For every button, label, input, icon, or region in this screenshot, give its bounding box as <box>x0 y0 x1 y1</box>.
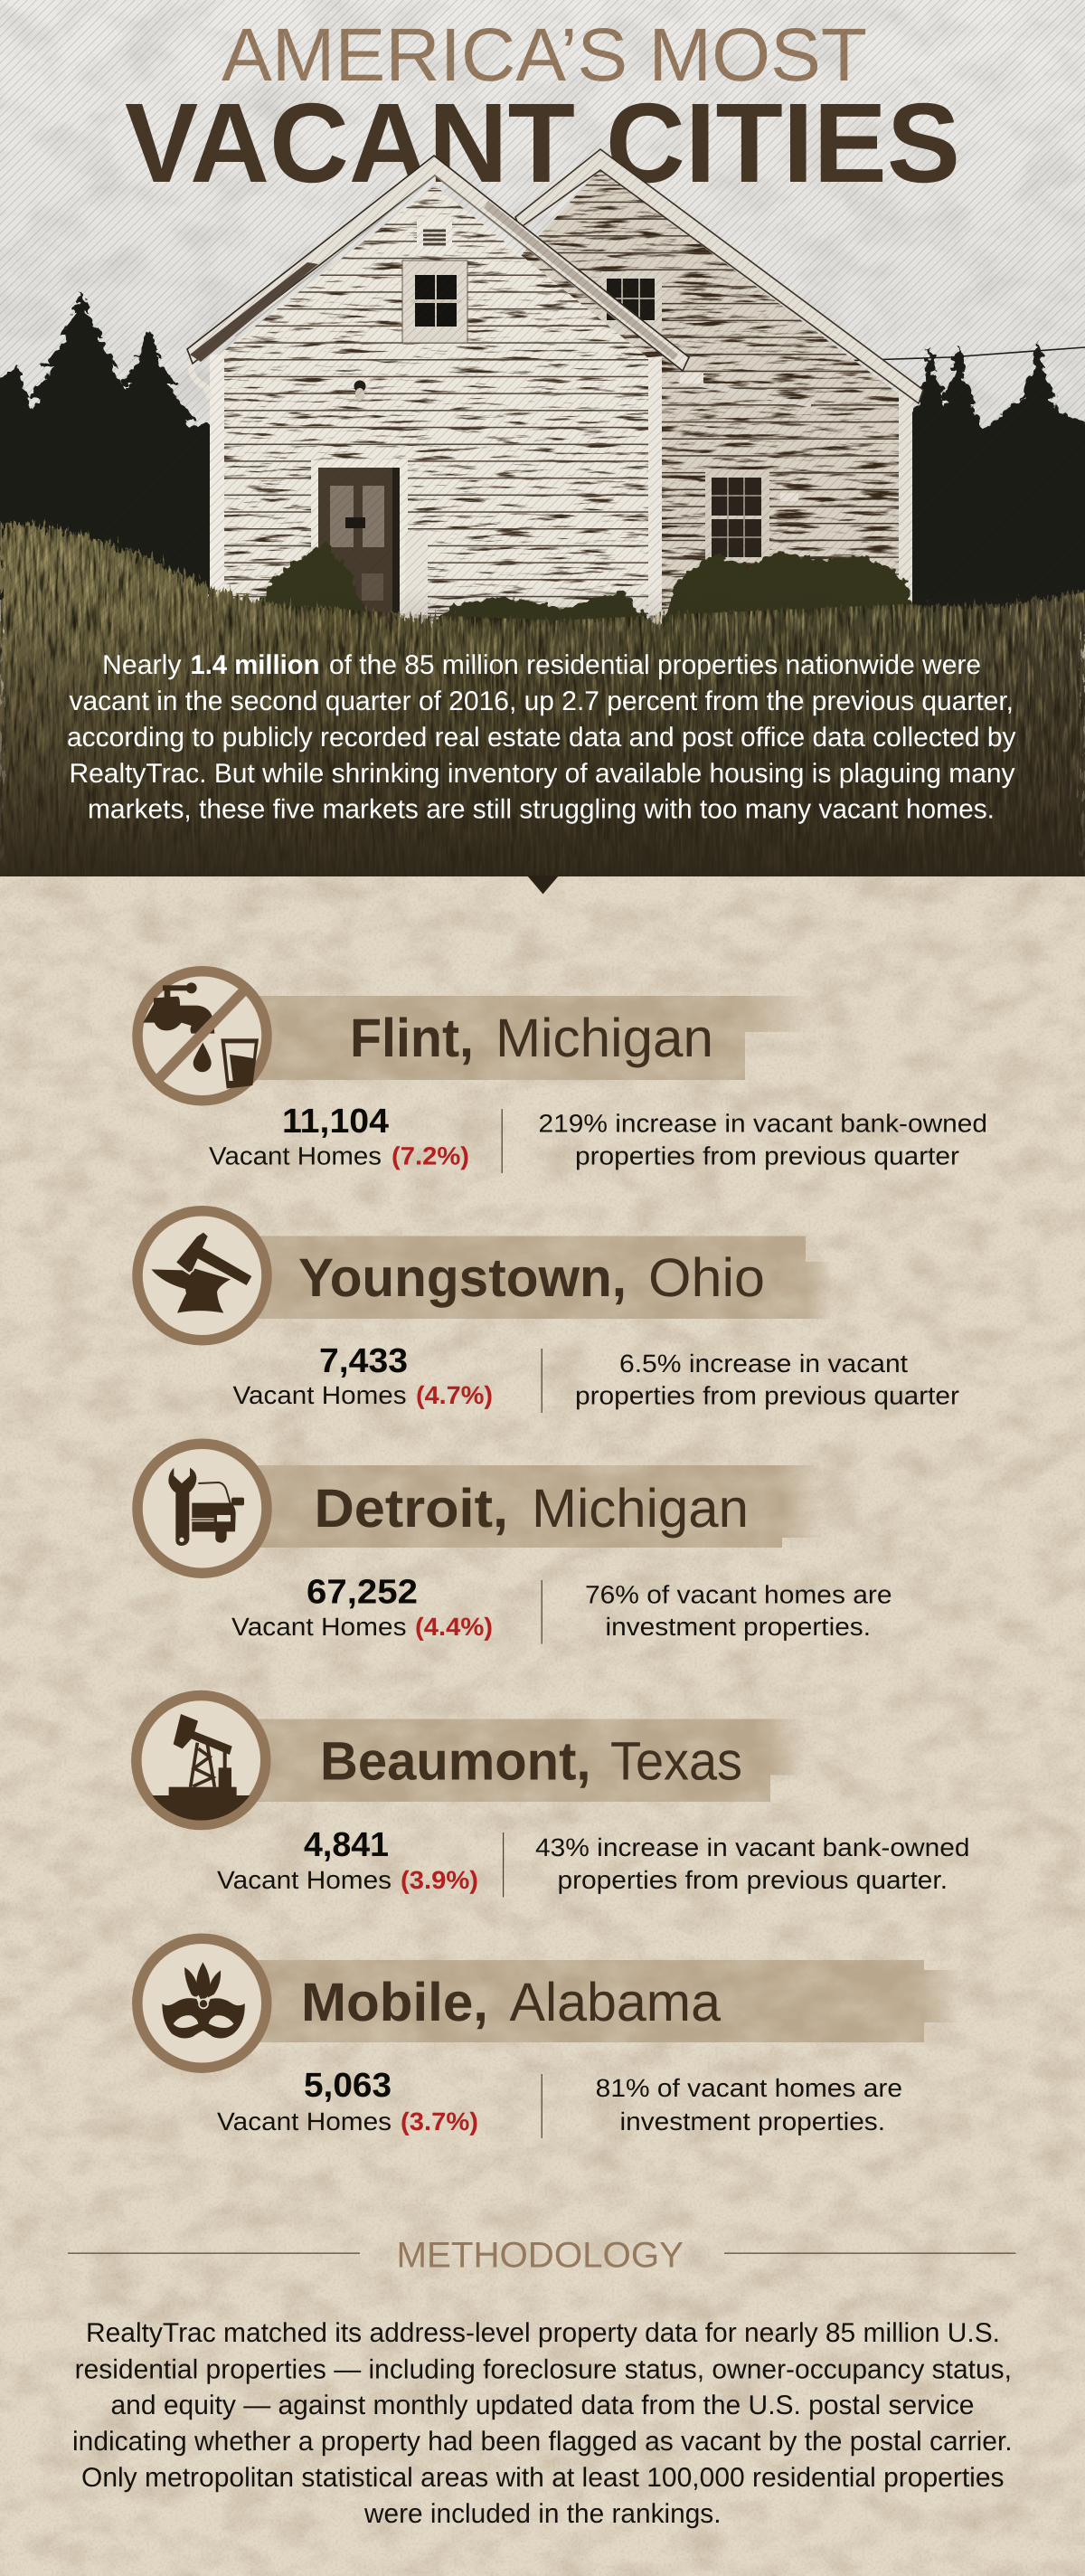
notch arrow <box>527 876 559 894</box>
intro paragraph: of the 85 million residential properties nationwide were <box>329 650 981 680</box>
dark fade behind text <box>0 588 1085 876</box>
city name <box>315 1478 749 1539</box>
stat: Vacant Homes <box>209 1141 382 1170</box>
lamp <box>354 380 365 401</box>
front roof <box>187 156 689 371</box>
paper background <box>0 876 1085 2576</box>
note: 81% of vacant homes are <box>596 2074 902 2102</box>
city name <box>301 1972 722 2032</box>
intro paragraph: markets, these five markets are still struggling with too many vacant homes. <box>88 794 995 825</box>
shrubs <box>253 543 922 633</box>
city: Beaumont <box>137 1695 970 1898</box>
icon: no water <box>137 971 267 1101</box>
grass <box>0 516 1085 895</box>
banner <box>203 1465 823 1548</box>
stat <box>217 1826 478 1894</box>
intro paragraph: RealtyTrac. But while shrinking inventory of available housing is plaguing many <box>69 759 1014 789</box>
stat: Vacant Homes <box>217 2107 392 2136</box>
icon: anvil <box>137 1211 267 1340</box>
methodology text: residential properties — including foreclosure status, owner-occupancy status, <box>75 2354 1012 2384</box>
note: 219% increase in vacant bank-owned <box>539 1109 987 1138</box>
icon: mask <box>137 1938 267 2068</box>
methodology text: were included in the rankings. <box>363 2499 722 2529</box>
note: investment properties. <box>620 2107 885 2136</box>
methodology heading: METHODOLOGY <box>396 2236 684 2276</box>
door <box>311 460 408 623</box>
methodology text: indicating whether a property had been flagged as vacant by the postal carrier. <box>72 2427 1013 2457</box>
stat: (7.2%) <box>392 1141 469 1170</box>
intro paragraph: 1.4 million <box>190 650 320 680</box>
stat: (4.7%) <box>416 1381 493 1409</box>
rear corner board <box>899 394 912 620</box>
stat <box>231 1574 493 1641</box>
city name: Michigan <box>532 1478 749 1539</box>
city name <box>320 1731 742 1791</box>
city name: Ohio <box>648 1247 765 1308</box>
note <box>596 2074 902 2136</box>
city name: Michigan <box>495 1008 713 1068</box>
city name: Beaumont, <box>320 1731 591 1791</box>
panel: hero photo <box>0 0 1085 895</box>
stat <box>233 1342 493 1409</box>
city name <box>350 1008 713 1068</box>
front window <box>402 260 467 343</box>
pipe <box>679 381 811 405</box>
note: 76% of vacant homes are <box>585 1581 892 1608</box>
note: 43% increase in vacant bank-owned <box>535 1833 969 1861</box>
icon: car and wrench <box>137 1444 267 1573</box>
stat: 7,433 <box>319 1342 408 1380</box>
rear lower window <box>705 469 769 563</box>
note: properties from previous quarter <box>575 1141 959 1170</box>
downspout <box>191 362 210 398</box>
city name: Youngstown, <box>298 1247 627 1308</box>
methodology text <box>72 2318 1013 2529</box>
stat: Vacant Homes <box>231 1613 407 1641</box>
title: AMERICA’S MOST <box>222 13 867 97</box>
stat <box>217 2067 478 2136</box>
stat: 67,252 <box>307 1574 418 1612</box>
note <box>539 1109 987 1170</box>
note: properties from previous quarter. <box>557 1866 948 1894</box>
rear roof <box>515 149 923 403</box>
stat: Vacant Homes <box>217 1866 392 1894</box>
note: investment properties. <box>606 1613 871 1641</box>
rear upper window <box>601 271 662 335</box>
banner <box>203 996 811 1080</box>
city name: Flint, <box>350 1008 474 1068</box>
note: properties from previous quarter <box>575 1382 959 1409</box>
banner <box>203 1236 832 1319</box>
note <box>575 1350 959 1409</box>
city name: Texas <box>610 1731 742 1791</box>
intro paragraph: Nearly <box>102 650 181 680</box>
vent <box>417 222 452 254</box>
city: Mobile <box>137 1938 961 2138</box>
intro paragraph: vacant in the second quarter of 2016, up 2.7 percent from the previous quarter, <box>69 687 1014 716</box>
house: rear wing <box>506 145 931 633</box>
trees <box>0 291 1085 633</box>
banner <box>203 1960 961 2042</box>
house: front gable <box>181 145 689 633</box>
note <box>535 1833 969 1894</box>
wire <box>854 346 1085 362</box>
title: VACANT CITIES <box>125 80 960 206</box>
note: 6.5% increase in vacant <box>619 1350 908 1378</box>
methodology text: Only metropolitan statistical areas with at least 100,000 residential properties <box>81 2463 1004 2493</box>
methodology text: and equity — against monthly updated data from the U.S. postal service <box>110 2391 975 2420</box>
porch post <box>405 532 428 622</box>
intro paragraph: according to publicly recorded real estate data and post office data collected by <box>67 723 1016 753</box>
hatch texture <box>0 0 1085 876</box>
city: Youngstown <box>137 1211 959 1413</box>
stat: (3.9%) <box>401 1866 478 1894</box>
corner boards <box>210 355 224 617</box>
stat: (3.7%) <box>401 2107 478 2136</box>
note <box>585 1581 892 1641</box>
icon: oil pump <box>137 1695 266 1825</box>
city: Flint <box>137 971 987 1173</box>
city name: Detroit, <box>315 1478 508 1539</box>
city name: Mobile, <box>301 1972 488 2032</box>
title <box>125 28 957 183</box>
stat <box>209 1103 469 1170</box>
sky <box>0 0 1085 429</box>
stat: Vacant Homes <box>233 1381 407 1409</box>
city: Detroit <box>137 1444 892 1644</box>
methodology text: RealtyTrac matched its address-level property data for nearly 85 million U.S. <box>86 2318 1000 2348</box>
intro paragraph <box>67 650 1016 825</box>
stat: 5,063 <box>304 2067 392 2105</box>
stat: 4,841 <box>304 1826 389 1864</box>
city name: Alabama <box>510 1972 722 2032</box>
stat: 11,104 <box>282 1103 389 1141</box>
banner <box>203 1719 806 1802</box>
stat: (4.4%) <box>415 1613 493 1641</box>
